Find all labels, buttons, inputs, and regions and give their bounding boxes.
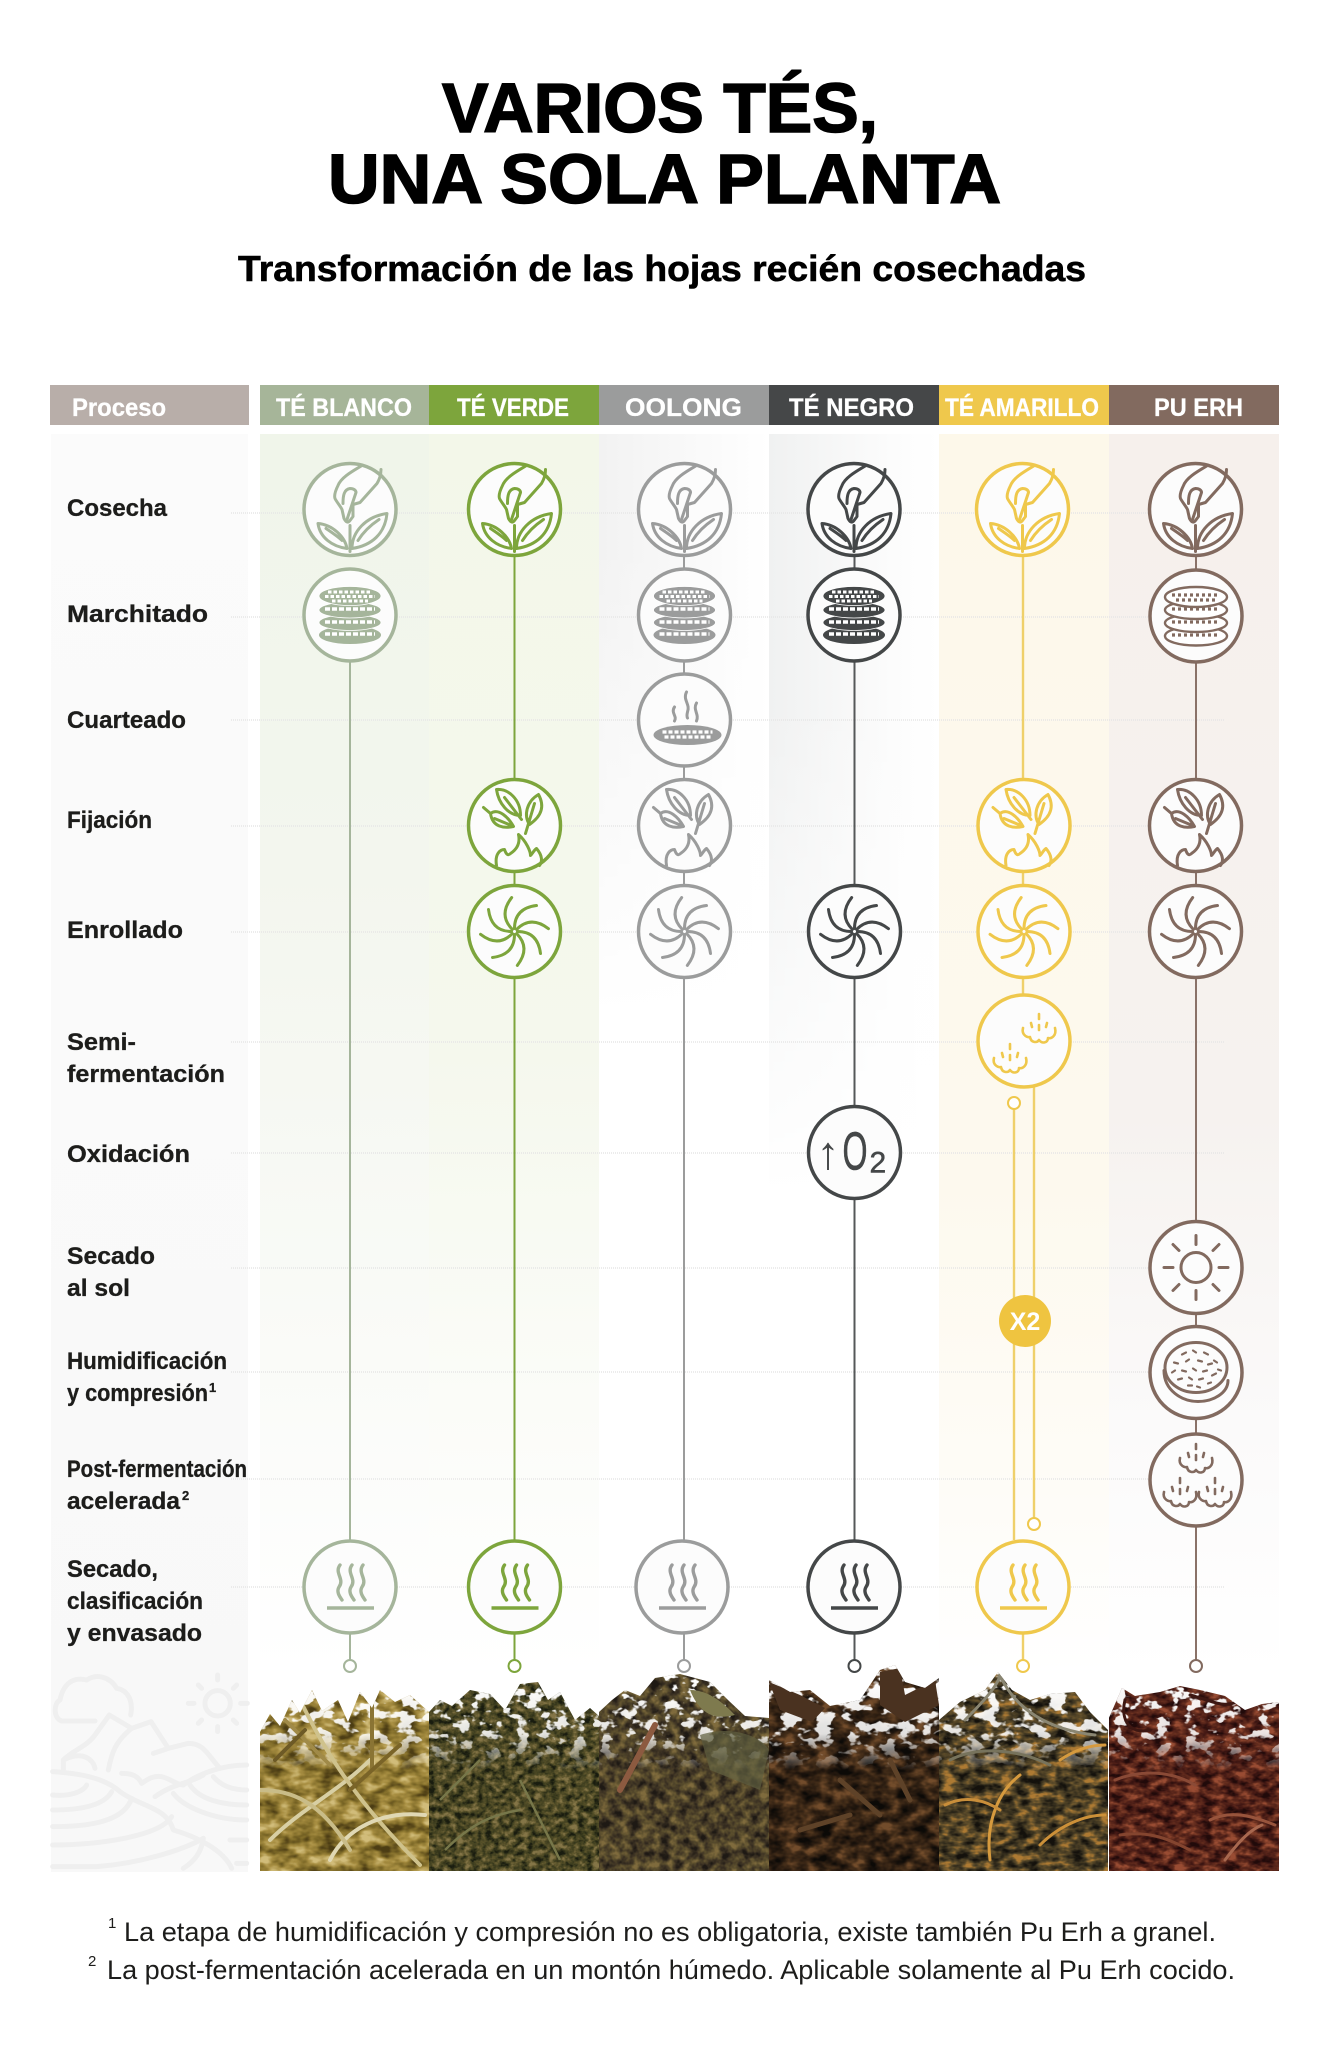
label: Cosecha: Cosecha — [67, 495, 168, 522]
label: Humidificación y compresión — [67, 1348, 227, 1407]
label: Semi-fermentación: Semi- — [67, 1029, 136, 1056]
icon: bruising — [638, 674, 730, 766]
icon: semi-fermentation — [978, 995, 1070, 1087]
column background: té negro — [769, 434, 939, 1194]
label: Secado al sol: al sol — [67, 1275, 130, 1302]
icon: oxidation — [808, 1106, 900, 1198]
column background: oolong — [599, 434, 769, 1014]
header: Té negro: TÉ NEGRO — [789, 393, 914, 422]
icon: harvest — [1150, 464, 1242, 556]
title: VARIOS TÉS, — [442, 69, 878, 147]
label: Humidificación y compresión: y compresión — [67, 1380, 208, 1407]
label: Marchitado: Marchitado — [67, 601, 208, 628]
icon: harvest — [468, 464, 560, 556]
badge: repeat twice — [999, 1295, 1051, 1347]
label: Cuarteado: Cuarteado — [67, 707, 186, 734]
header: Té blanco: TÉ BLANCO — [276, 393, 412, 422]
subtitle: Transformación de las hojas recién cosechadas — [238, 248, 1086, 289]
column fade: negro — [769, 700, 939, 1195]
end node — [678, 1660, 690, 1672]
header: Oolong: OOLONG — [625, 394, 742, 422]
end node — [508, 1660, 520, 1672]
label: Semi-fermentación — [67, 1029, 225, 1088]
label: Secado al sol: Secado — [67, 1243, 155, 1270]
icon: drying — [468, 1541, 560, 1633]
end node — [1190, 1660, 1202, 1672]
header: Proceso — [50, 385, 249, 425]
icon: oxidation: 2 — [870, 1146, 886, 1180]
column background: té blanco — [260, 434, 429, 1674]
header: Té negro — [769, 385, 939, 425]
icon: drying — [977, 1541, 1069, 1633]
header: Té blanco — [260, 385, 429, 425]
table header row — [50, 385, 1279, 425]
column: té blanco process line — [304, 464, 396, 1672]
icon: fixation — [468, 780, 560, 872]
icon: sun drying — [1150, 1222, 1242, 1314]
header: Oolong — [599, 385, 769, 425]
icon: withering — [808, 569, 900, 661]
column background: té verde — [429, 434, 599, 1674]
header: Té verde: TÉ VERDE — [457, 393, 569, 422]
column: té amarillo process line — [976, 464, 1070, 1672]
footnote 1: 1 — [108, 1915, 116, 1932]
photo: té verde leaves — [429, 1682, 599, 1871]
icon: withering — [1150, 570, 1242, 662]
icon: drying — [304, 1541, 396, 1633]
title — [328, 69, 1001, 218]
column fade: oolong — [599, 540, 769, 1015]
end node — [848, 1660, 860, 1672]
label: Post-fermentación acelerada: Post-fermentación — [67, 1456, 247, 1483]
end node — [344, 1660, 356, 1672]
label: Secado al sol — [67, 1243, 155, 1302]
label: Secado, clasificación y envasado: clasificación — [67, 1588, 203, 1615]
label: Secado, clasificación y envasado: Secado, — [67, 1556, 158, 1583]
header: Té verde — [429, 385, 599, 425]
badge: repeat twice: X2 — [1010, 1308, 1040, 1336]
column background: té amarillo — [939, 434, 1109, 1674]
icon: fixation — [1150, 780, 1242, 872]
photo: té negro leaves — [769, 1660, 939, 1872]
icon: fixation — [978, 780, 1070, 872]
icon: rolling — [638, 886, 730, 978]
footnotes — [88, 1915, 1235, 1985]
panel: process labels column — [51, 434, 248, 1872]
label: Humidificación y compresión: 1 — [209, 1380, 216, 1395]
header: Pu Erh: PU ERH — [1154, 394, 1243, 422]
header: Té amarillo: TÉ AMARILLO — [945, 393, 1099, 422]
icon: fixation — [638, 780, 730, 872]
title: UNA SOLA PLANTA — [328, 140, 1001, 218]
icon: rolling — [808, 886, 900, 978]
icon: drying — [636, 1541, 728, 1633]
column: oolong process line — [636, 464, 730, 1672]
icon: harvest — [808, 464, 900, 556]
label: Semi-fermentación: fermentación — [67, 1061, 225, 1088]
icon: oxidation: ↑ — [816, 1126, 840, 1178]
label: Humidificación y compresión: Humidificación — [67, 1348, 227, 1375]
column backgrounds — [260, 434, 1279, 1674]
icon: rolling — [1150, 886, 1242, 978]
header: Té amarillo — [939, 385, 1109, 425]
icon: oxidation: O — [842, 1122, 868, 1182]
label: Fijación: Fijación — [67, 807, 152, 834]
footnote 2: La post-fermentación acelerada en un montón húmedo. Aplicable solamente al Pu Erh cocido. — [107, 1955, 1235, 1985]
column: té verde process line — [468, 464, 560, 1672]
footnote 2: 2 — [88, 1953, 96, 1970]
label: Post-fermentación acelerada: acelerada — [67, 1488, 181, 1515]
icon: rolling — [978, 886, 1070, 978]
header: Pu Erh — [1109, 385, 1279, 425]
icon: post-fermentation — [1150, 1434, 1242, 1526]
icon: drying — [808, 1541, 900, 1633]
label: Post-fermentación acelerada — [67, 1456, 247, 1515]
photo: té blanco leaves — [260, 1690, 429, 1871]
column: pu erh process line — [1150, 464, 1242, 1672]
process step labels — [67, 495, 247, 1647]
photo: pu erh leaves — [1109, 1686, 1279, 1871]
label: Secado, clasificación y envasado: y envasado — [67, 1620, 202, 1647]
column background: pu erh — [1109, 434, 1279, 1674]
label: Post-fermentación acelerada: 2 — [182, 1488, 189, 1503]
icon: compression — [1150, 1326, 1242, 1418]
photo: té amarillo leaves — [939, 1660, 1109, 1872]
end node — [1017, 1660, 1029, 1672]
label: Secado, clasificación y envasado — [67, 1556, 203, 1647]
repeat node top — [1008, 1097, 1020, 1109]
icon: rolling — [468, 886, 560, 978]
footnote 1: La etapa de humidificación y compresión no es obligatoria, existe también Pu Erh a granel. — [124, 1917, 1216, 1947]
label: Enrollado: Enrollado — [67, 917, 183, 944]
icon: withering — [304, 569, 396, 661]
row guide lines — [231, 513, 1225, 1587]
icon: harvest — [976, 464, 1068, 556]
icon: harvest — [638, 464, 730, 556]
column: té negro process line — [808, 464, 900, 1672]
header: Proceso: Proceso — [72, 394, 166, 422]
repeat node bottom — [1028, 1518, 1040, 1530]
watermark: landscape illustration — [53, 1675, 247, 1868]
photo: oolong leaves — [599, 1660, 769, 1872]
icon: withering — [638, 569, 730, 661]
icon: harvest — [304, 464, 396, 556]
label: Oxidación: Oxidación — [67, 1141, 190, 1168]
